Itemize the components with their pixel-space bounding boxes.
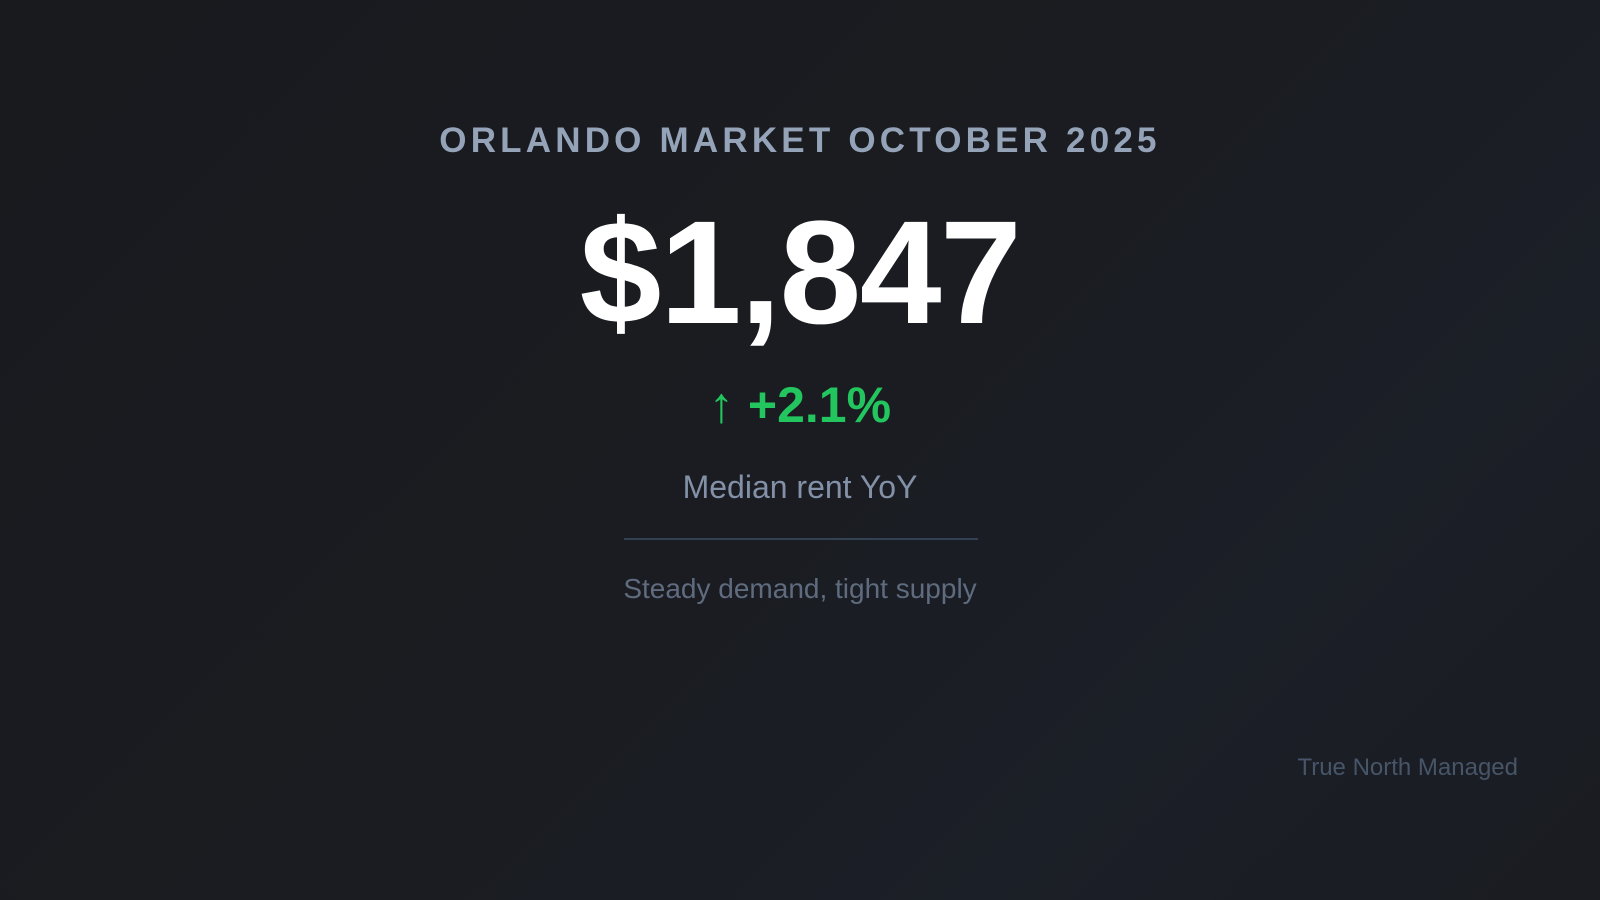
headline value: $1,847 [580, 191, 1020, 355]
change indicator: ↑ +2.1% [709, 377, 891, 433]
metric label: Median rent YoY [683, 469, 917, 505]
caption: Steady demand, tight supply [623, 573, 977, 604]
title: ORLANDO MARKET OCTOBER 2025 [439, 121, 1161, 160]
divider line [624, 538, 978, 540]
brand footer: True North Managed [1297, 754, 1518, 781]
